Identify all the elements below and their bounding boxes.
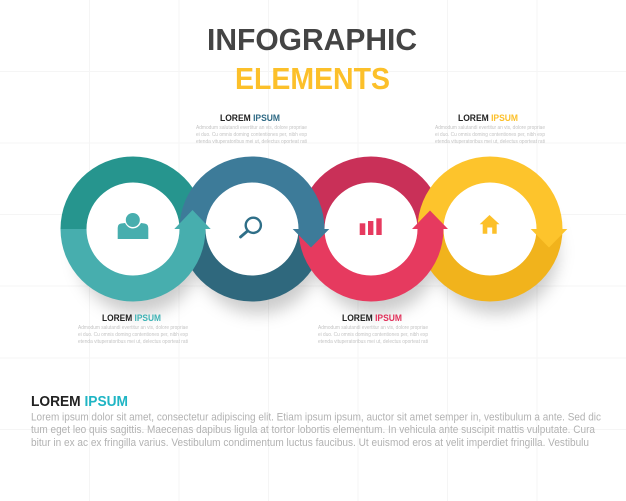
title: INFOGRAPHIC <box>207 22 417 57</box>
text block: bottom red: LOREM IPSUM <box>342 313 402 323</box>
title: ELEMENTS <box>235 61 390 96</box>
icon: person <box>118 213 148 239</box>
ring 4 lower half <box>418 229 562 302</box>
ring 2 lower half <box>180 229 324 302</box>
ring 1 lower half <box>60 229 206 302</box>
text block: top yellow: LOREM IPSUM <box>458 113 518 123</box>
footer text block: bitur in ex ac ex fringilla varius. Vestibulum condimentum luctus faucibus. Ut euismod eros at velit imperdiet fringilla. Vestibulu <box>31 437 589 449</box>
text block: bottom red: ei duo. Cu omnis doming contentiones per, nibh exp <box>318 332 428 338</box>
ring shadows <box>77 190 558 314</box>
ring 1 upper half <box>60 156 206 229</box>
text block: bottom teal: etenda vituperatoribus mei ut, delectus oporteat rati <box>78 339 188 345</box>
footer text block: Lorem ipsum dolor sit amet, consectetur adipiscing elit. Etiam ipsum ipsum, auctor sit amet semper in, vestibulum a ante. Sed dic <box>31 412 602 424</box>
ring 3 upper half <box>298 156 444 229</box>
text block: bottom teal: Admodum salutandi evertitur an vis, dolore propriae <box>78 325 188 331</box>
arrow: blue down <box>293 229 329 248</box>
white ring centres <box>83 179 540 279</box>
text block: top yellow: etenda vituperatoribus mei ut, delectus oporteat rati <box>435 139 545 145</box>
footer text block: tum eget leo quis sagittis. Maecenas dapibus ligula at tortor lobortis elementum. In vehicula ante suscipit mattis vulputate. Cura <box>31 424 595 436</box>
text block: bottom teal: ei duo. Cu omnis doming contentiones per, nibh exp <box>78 332 188 338</box>
footer text block <box>31 394 602 449</box>
icon: bar chart <box>360 218 382 235</box>
text block: bottom red: Admodum salutandi evertitur an vis, dolore propriae <box>318 325 428 331</box>
ring 4 upper half <box>418 156 562 229</box>
text block: bottom red: etenda vituperatoribus mei ut, delectus oporteat rati <box>318 339 428 345</box>
arrow: red up <box>412 210 448 229</box>
text block: top yellow: ei duo. Cu omnis doming contentiones per, nibh exp <box>435 132 545 138</box>
icon: house <box>480 215 500 234</box>
title <box>207 22 417 96</box>
text block: top yellow: Admodum salutandi evertitur an vis, dolore propriae <box>435 125 545 131</box>
text block: top yellow <box>435 113 545 145</box>
arrow: yellow down <box>531 229 567 248</box>
text block: bottom teal: LOREM IPSUM <box>102 313 161 323</box>
ring 2 upper half <box>180 156 324 229</box>
text block: bottom red <box>318 313 428 345</box>
arrow: teal up <box>174 210 211 229</box>
ring 3 lower half <box>298 229 444 302</box>
text block: top blue <box>196 113 307 145</box>
text block: top blue: etenda vituperatoribus mei ut, delectus oporteat rati <box>196 139 307 145</box>
icon: magnifier <box>240 218 261 237</box>
text block: top blue: ei duo. Cu omnis doming contentiones per, nibh exp <box>196 132 307 138</box>
footer text block: LOREM IPSUM <box>31 394 128 410</box>
text block: bottom teal <box>78 313 188 345</box>
text block: top blue: Admodum salutandi evertitur an vis, dolore propriae <box>196 125 307 131</box>
text block: top blue: LOREM IPSUM <box>220 113 280 123</box>
